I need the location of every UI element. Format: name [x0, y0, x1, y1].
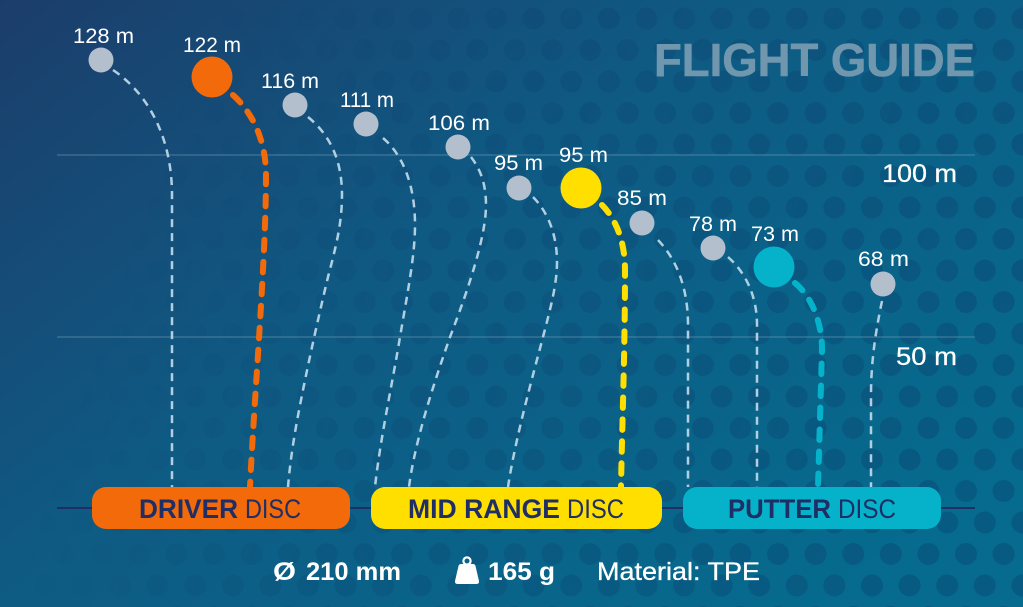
panel: mid range disc: DISC [567, 494, 624, 524]
baseline axis [57, 507, 975, 509]
panel: putter disc: PUTTER [728, 494, 831, 524]
spec: diameter: 210 mm [306, 558, 401, 586]
panel: driver disc [92, 487, 350, 529]
panel: mid range disc [371, 487, 662, 529]
distance labels: 73 m [751, 223, 799, 246]
distance labels: 95 m [559, 144, 608, 167]
gridline: 100 m [57, 154, 975, 156]
distance labels: 95 m [494, 152, 543, 175]
distance labels: 106 m [428, 112, 490, 135]
disc markers [88, 48, 896, 296]
panel: driver disc: DRIVER [139, 494, 238, 524]
title: FLIGHT GUIDE [654, 34, 975, 86]
flight path: mid range disc [602, 205, 625, 487]
axis label: 100 m: 100 m [882, 160, 957, 188]
spec: diameter: Ø [273, 558, 296, 586]
spec: weight: 165 g [488, 558, 555, 586]
icon: weight [455, 557, 479, 584]
gridline: 50 m [57, 336, 975, 338]
distance labels: 116 m [261, 70, 319, 93]
distance labels: 122 m [183, 34, 241, 57]
flight path: putter disc [795, 283, 822, 487]
spec: material: Material: TPE [597, 558, 760, 586]
distance labels [73, 25, 909, 271]
panel: putter disc: DISC [838, 494, 896, 524]
flight path: driver disc [233, 95, 266, 487]
panel: mid range disc: MID RANGE [408, 494, 560, 524]
panel: driver disc: DISC [245, 494, 301, 524]
flight paths: grey discs [113, 70, 882, 487]
distance labels: 111 m [340, 89, 394, 112]
distance labels: 78 m [689, 213, 737, 236]
axis label: 50 m: 50 m [896, 343, 957, 371]
distance labels: 128 m [73, 25, 134, 48]
distance labels: 85 m [617, 187, 667, 210]
panel: putter disc [683, 487, 941, 529]
distance labels: 68 m [858, 248, 909, 271]
